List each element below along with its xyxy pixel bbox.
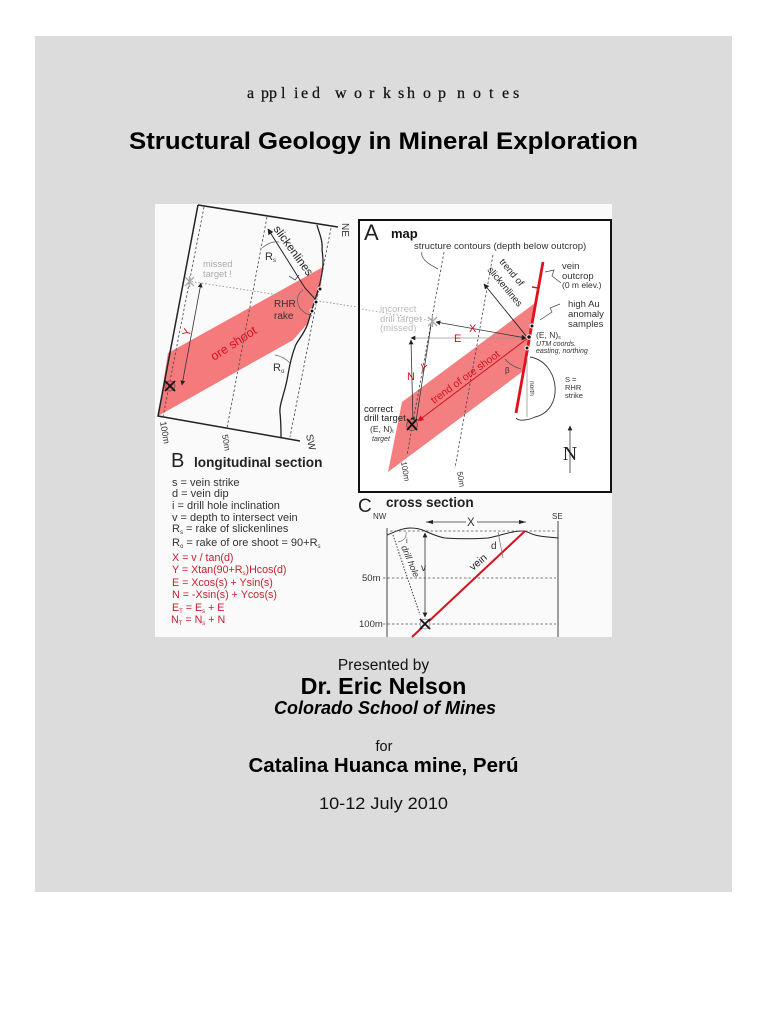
panel B: legend and formulas: s: [202, 621, 205, 627]
panel A: map diagram: (missed): [380, 323, 416, 334]
panel A: map diagram: N: [407, 371, 415, 383]
panel B: legend and formulas: N: [171, 614, 179, 626]
panel B: legend and formulas: = N: [182, 614, 202, 626]
panel A: map diagram: S =: [565, 375, 577, 384]
panel A: map diagram: drill target: [380, 314, 422, 325]
panel B: legend and formulas: T: [179, 609, 183, 615]
affiliation: Colorado School of Mines: [274, 698, 496, 718]
panel C: cross section diagram: v: [421, 563, 426, 574]
panel B: longitudinal section diagram: R: [265, 251, 273, 263]
panel A: map diagram: samples: [568, 319, 604, 330]
panel A: map diagram: Y: [418, 362, 429, 376]
panel C: cross section diagram: cross section: [386, 495, 474, 510]
panel B: legend and formulas: s: [202, 609, 205, 615]
panel B: legend and formulas: X = v / tan(d): [172, 552, 233, 564]
panel B: legend and formulas: v = depth to intersect vein: [172, 512, 298, 524]
panel B: longitudinal section diagram: SW: [303, 433, 317, 452]
panel B: legend and formulas: Y = Xtan(90+R: [172, 564, 243, 576]
presenter name: Dr. Eric Nelson: [301, 673, 466, 699]
date: 10-12 July 2010: [319, 794, 448, 813]
title: Structural Geology in Mineral Exploration: [129, 128, 638, 155]
panel B: longitudinal section diagram: ore shoot: [208, 323, 260, 364]
panel A: map diagram: s: [558, 335, 561, 341]
panel A: map diagram: incorrect: [380, 304, 417, 315]
panel C: cross section diagram: i: [406, 536, 408, 545]
panel A: map diagram: strike: [565, 391, 583, 400]
icon: correct target cross: [165, 381, 175, 391]
panel A: map diagram: X: [469, 323, 477, 335]
panel B: longitudinal section diagram: 50m: [220, 434, 233, 452]
panel B: longitudinal section diagram: R: [273, 362, 281, 374]
panel A: map diagram: RHR: [565, 383, 582, 392]
panel B: longitudinal section diagram: missed: [203, 259, 232, 269]
panel B: legend and formulas: s = vein strike: [172, 477, 240, 489]
panel B: legend and formulas: R: [172, 523, 180, 535]
panel B: legend and formulas: E: [172, 602, 179, 614]
icon: intersect cross: [420, 619, 430, 629]
panel A: map diagram: easting, northing: [536, 348, 588, 355]
icon: incorrect target star: [428, 315, 437, 327]
panel A: map diagram: (E, N): [370, 424, 392, 434]
panel A: map diagram: (0 m elev.): [562, 280, 602, 290]
panel A: map diagram: t: [392, 429, 394, 435]
ore shoot map polygon: [388, 303, 535, 472]
panel B: legend and formulas: T: [179, 621, 183, 627]
panel B: legend and formulas: = rake of ore shoot = 90+R: [183, 537, 318, 549]
panel B: longitudinal section diagram: RHR: [274, 299, 296, 310]
panel C: cross section diagram: SE: [552, 512, 563, 521]
panel B: legend and formulas: s: [180, 530, 183, 536]
panel B: legend and formulas: longitudinal section: [194, 455, 322, 470]
panel A: map diagram: UTM coords.: [536, 341, 576, 348]
panel B: legend and formulas: = E: [183, 602, 202, 614]
panel C: cross section diagram: drill hole: [399, 544, 421, 579]
panel B: legend and formulas: = rake of slickenlines: [183, 523, 289, 535]
panel A: map diagram: 50m: [455, 471, 467, 488]
panel B: longitudinal section diagram: 100m: [158, 421, 172, 445]
panel A: map diagram: E: [454, 333, 461, 345]
presented by: Presented by: [338, 657, 429, 674]
panel A: map diagram: target: [372, 436, 391, 443]
panel B: legend and formulas: s: [243, 571, 246, 577]
panel A: map diagram: drill target: [364, 413, 406, 424]
panel B: longitudinal section diagram: slickenlines: [271, 224, 315, 279]
icon: north arrow: [563, 426, 577, 473]
red vein outcrop: [516, 262, 543, 413]
panel B: legend and formulas: N = -Xsin(s) + Ycos(s): [172, 589, 277, 601]
panel A: map diagram: [359, 220, 611, 492]
panel B: legend and formulas: )Hcos(d): [246, 564, 286, 576]
panel B: legend and formulas: E = Xcos(s) + Ysin(s): [172, 577, 273, 589]
panel A: map diagram: north: [528, 381, 535, 396]
panel A: map diagram: map: [391, 226, 418, 241]
icon: north arrow: N: [563, 443, 577, 465]
panel A: map diagram: slickenlines: [485, 265, 525, 309]
panel C: cross section diagram: 100m: [359, 619, 383, 630]
panel C: cross section diagram: vein: [467, 552, 490, 573]
panel A: map diagram: (E, N): [536, 330, 558, 340]
cover panel background: [35, 36, 732, 892]
panel A: map diagram: trend of ore shoot: [429, 348, 502, 406]
panel A: map diagram: high Au: [568, 299, 600, 310]
panel A: map diagram: correct: [364, 404, 393, 415]
panel B: legend and formulas: o: [180, 544, 184, 550]
panel A: map diagram: 100m: [399, 461, 411, 482]
panel B: legend and formulas: + E: [205, 602, 224, 614]
panel A: map diagram: structure contours (depth below outcrop): [414, 241, 586, 252]
panel A: map diagram: outcrop: [562, 271, 594, 282]
panel B: longitudinal section diagram: o: [281, 369, 285, 375]
icon: correct drill target cross: [406, 419, 418, 430]
panel A: map diagram: β: [505, 366, 510, 375]
series label: appliedworkshopnotes: [247, 85, 519, 102]
panel A: map diagram: trend of: [497, 257, 526, 289]
panel A: map diagram: vein: [562, 261, 579, 272]
panel C: cross section diagram: C: [358, 496, 372, 517]
for: for: [376, 739, 393, 755]
panel C: cross section diagram: [358, 495, 563, 637]
panel B: legend and formulas: i = drill hole inclination: [172, 500, 280, 512]
panel B: longitudinal section diagram: s: [273, 258, 276, 264]
panel B: legend and formulas: R: [172, 537, 180, 549]
panel B: legend and formulas: [171, 450, 322, 627]
panel C: cross section diagram: NW: [373, 512, 387, 521]
panel A: map diagram: A: [364, 220, 379, 245]
panel A: map diagram: anomaly: [568, 309, 604, 320]
panel B: longitudinal section diagram: rake: [274, 311, 294, 322]
panel B: longitudinal section diagram: [158, 205, 357, 452]
panel C: cross section diagram: d: [491, 541, 497, 552]
icon: missed target star: [185, 276, 194, 287]
geology figure: [155, 204, 612, 637]
panel B: longitudinal section diagram: target !: [203, 269, 232, 279]
panel C: cross section diagram: X: [467, 517, 475, 529]
panel B: longitudinal section diagram: Y: [181, 326, 195, 338]
panel B: legend and formulas: s: [318, 544, 321, 550]
panel B: longitudinal section diagram: NE: [339, 223, 350, 237]
panel B: legend and formulas: B: [171, 450, 184, 472]
panel C: cross section diagram: 50m: [362, 573, 381, 584]
panel B: legend and formulas: + N: [205, 614, 225, 626]
client mine: Catalina Huanca mine, Perú: [248, 754, 519, 777]
ore shoot polygon: [158, 267, 323, 416]
panel B: legend and formulas: d = vein dip: [172, 488, 229, 500]
